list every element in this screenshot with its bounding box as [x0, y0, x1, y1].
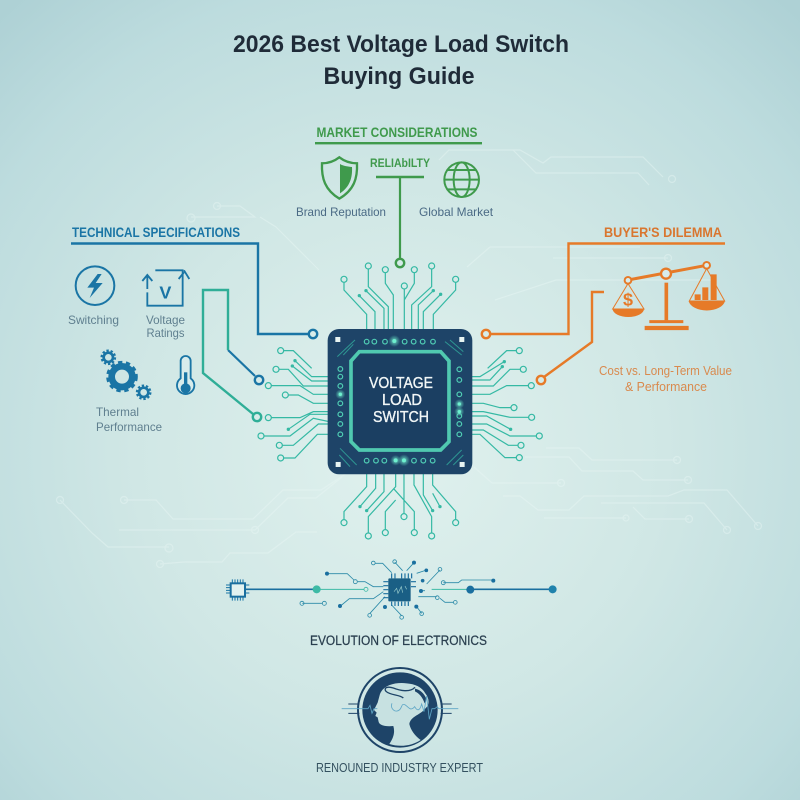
label: thermal performance: Performance	[96, 420, 162, 434]
icon: gears	[102, 351, 150, 399]
heading: buyer's dilemma: BUYER'S DILEMMA	[604, 224, 722, 240]
connector: teal to chip	[203, 290, 261, 421]
icon: globe	[444, 162, 479, 197]
label: thermal performance: Thermal	[96, 405, 139, 419]
title: 2026 Best Voltage Load Switch	[233, 31, 569, 58]
label: brand reputation: Brand Reputation	[296, 205, 386, 219]
label: cost vs long-term value: Cost vs. Long-Term Value	[599, 364, 732, 378]
chip label	[369, 375, 433, 426]
label: reliability: RELIAbILTY	[370, 156, 430, 170]
pulse line	[342, 696, 458, 719]
small chip icon	[226, 579, 249, 601]
label: switching: Switching	[68, 313, 119, 327]
icon: voltage ratings: V	[159, 283, 171, 303]
connector: technical to chip	[71, 244, 317, 338]
icon: balance scale: $	[623, 290, 633, 310]
label: thermal performance	[96, 405, 162, 434]
central small chip	[383, 573, 416, 606]
label: global market: Global Market	[419, 205, 494, 219]
chip pads	[338, 339, 462, 463]
label: renowned industry expert: RENOUNED INDUSTRY EXPERT	[316, 761, 483, 775]
chip label: LOAD	[382, 392, 422, 409]
title	[233, 31, 569, 90]
icon: shield	[322, 157, 357, 199]
heading: market considerations: MARKET CONSIDERATIONS	[316, 124, 478, 140]
heading: technical specifications: TECHNICAL SPECIFICATIONS	[72, 224, 240, 240]
connector: lower orange to chip	[537, 292, 604, 384]
connector: buyer's dilemma to chip	[482, 244, 725, 338]
label: cost vs long-term value	[599, 364, 732, 394]
icon: balance scale	[613, 262, 725, 328]
icon: switching bolt	[76, 266, 114, 305]
panel: market considerations	[296, 124, 494, 267]
label: voltage ratings	[146, 313, 185, 340]
label: cost vs long-term value: & Performance	[625, 380, 707, 394]
label: voltage ratings: Voltage	[146, 313, 185, 327]
inner octagon	[351, 352, 449, 450]
head silhouette	[374, 683, 429, 746]
icon: voltage ratings	[142, 270, 189, 306]
label: voltage ratings: Ratings	[146, 326, 184, 340]
panel: technical specifications	[68, 224, 317, 434]
title: Buying Guide	[324, 63, 474, 90]
chip label: SWITCH	[373, 409, 429, 426]
evolution of electronics timeline	[226, 560, 557, 619]
chip body	[328, 329, 472, 474]
connector: reliability to chip	[376, 177, 424, 267]
chip label: VOLTAGE	[369, 375, 433, 392]
connector: thermal blue branch	[228, 350, 263, 384]
timeline line	[246, 585, 557, 594]
circuit traces	[264, 269, 537, 533]
chip with traces	[258, 263, 542, 539]
small circuit traces	[300, 560, 493, 619]
icon: renowned expert emblem	[342, 668, 458, 752]
heading: evolution of electronics: EVOLUTION OF ELECTRONICS	[310, 633, 487, 648]
panel: buyer's dilemma	[482, 224, 732, 394]
icon: thermometer	[177, 356, 194, 394]
